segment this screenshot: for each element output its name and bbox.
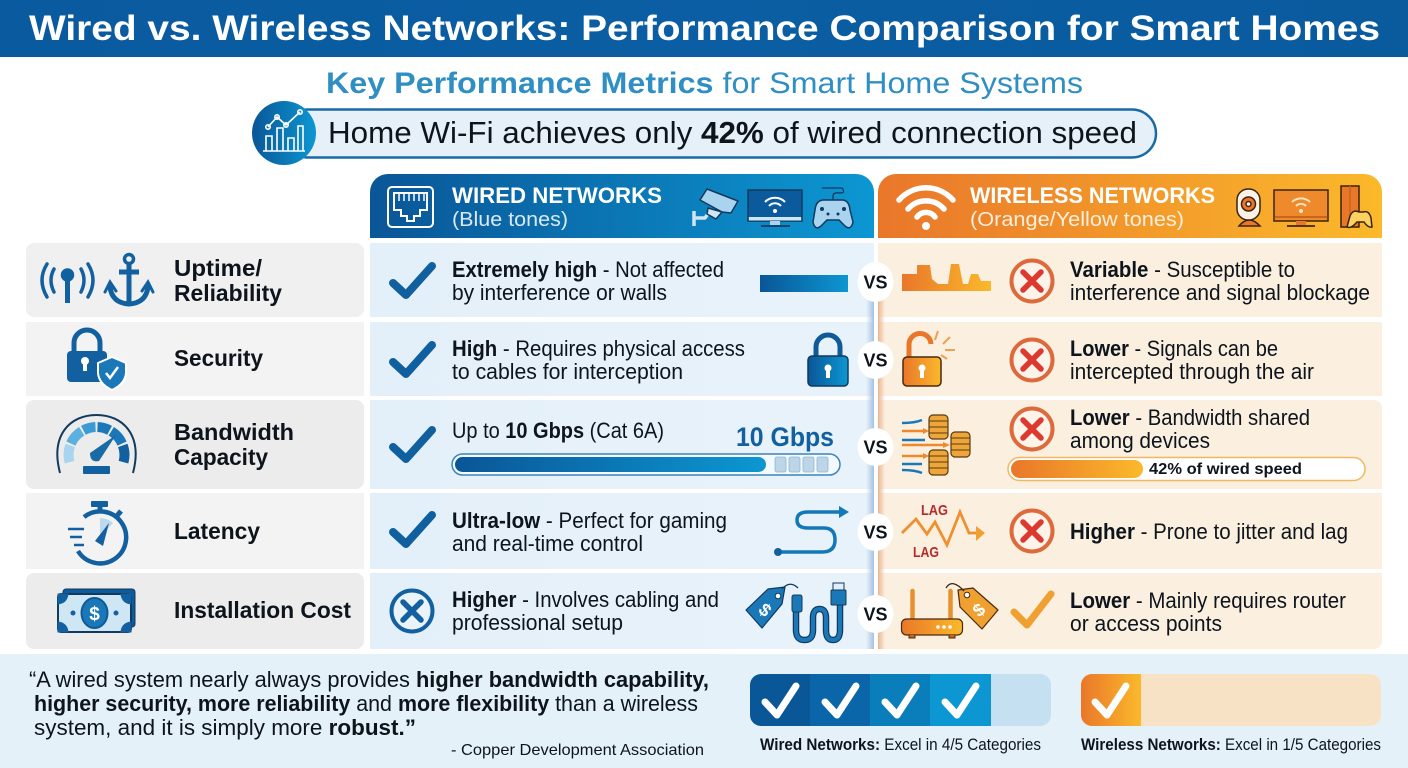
wired text — [452, 336, 745, 384]
wired text: Up to 10 Gbps (Cat 6A) — [452, 418, 664, 443]
panel: wired header — [370, 174, 874, 238]
icon: stopwatch — [68, 501, 126, 563]
wired score bar — [750, 674, 1051, 754]
icon: router and tag — [902, 584, 998, 638]
row: uptime / reliability — [42, 254, 1370, 306]
wired text — [452, 587, 719, 635]
vs badges: VS — [863, 604, 888, 624]
vs badges: VS — [863, 522, 888, 542]
vs badges: VS — [863, 438, 888, 458]
wireless text: or access points — [1070, 611, 1222, 636]
icon: banknote — [58, 589, 135, 632]
wireless cross — [1012, 408, 1052, 450]
icon: monitor with wifi — [748, 190, 802, 226]
10 Gbps value: 10 Gbps — [736, 422, 834, 452]
label: Bandwidth — [174, 419, 294, 445]
wireless text: among devices — [1070, 428, 1210, 453]
panel: bottom summary band — [0, 654, 1408, 768]
wireless text: Variable - Susceptible to — [1070, 257, 1295, 282]
row: bandwidth — [57, 405, 1365, 480]
row: uptime / reliability: Reliability — [174, 280, 282, 306]
wireless text: Lower - Signals can be — [1070, 336, 1278, 361]
wired bandwidth bar — [452, 454, 840, 475]
icon: game console — [1341, 186, 1372, 227]
title banner: Wired vs. Wireless Networks: Performance Comparison for Smart Homes — [29, 9, 1380, 48]
vs badges: VS — [863, 272, 888, 292]
wireless text: interference and signal blockage — [1070, 280, 1370, 305]
wireless bandwidth bar: 42% of wired speed — [1149, 461, 1302, 478]
icon: price tag and cable: $ — [755, 599, 775, 621]
icon: lag jitter: LAG — [913, 544, 939, 561]
wired cross — [392, 590, 432, 632]
label: Uptime/ — [174, 255, 263, 281]
subtitle: Key Performance Metrics for Smart Home Systems — [326, 67, 1083, 100]
icon: orange monitor — [1274, 190, 1328, 226]
label: Security — [174, 345, 263, 371]
panel: wired header: (Blue tones) — [452, 209, 568, 231]
callout: Wi-Fi speed statistic — [252, 101, 1156, 165]
wired check — [393, 430, 432, 459]
wireless text: Lower - Mainly requires router — [1070, 588, 1346, 613]
icon: anchor — [105, 254, 153, 304]
wired text — [452, 508, 727, 556]
panel: wireless header: WIRELESS NETWORKS — [970, 183, 1215, 208]
wired check — [393, 266, 432, 295]
row: bandwidth: Capacity — [174, 444, 268, 470]
wireless score bar: Wireless Networks: Excel in 1/5 Categories — [1081, 735, 1381, 754]
quote: higher security, more reliability and more flexibility than a wireless — [34, 691, 698, 716]
icon: security camera — [694, 189, 738, 226]
label: Latency — [174, 518, 260, 544]
panel: wireless header — [878, 174, 1382, 238]
wireless bandwidth bar — [1008, 458, 1365, 480]
wireless cross — [1012, 510, 1052, 552]
wireless text: Higher - Prone to jitter and lag — [1070, 519, 1348, 544]
wireless text — [1070, 257, 1370, 305]
quote: - Copper Development Association — [451, 742, 704, 759]
icon: low-latency path arrow — [774, 506, 849, 556]
row: installation cost — [58, 583, 1346, 640]
wired text — [452, 257, 724, 305]
wireless text: intercepted through the air — [1070, 359, 1314, 384]
row: security — [67, 330, 1314, 390]
wired text: High - Requires physical access — [452, 336, 745, 361]
panel: wireless header: (Orange/Yellow tones) — [970, 209, 1184, 231]
wireless cross — [1012, 340, 1052, 380]
wired score bar: Wired Networks: Excel in 4/5 Categories — [760, 735, 1041, 754]
icon: lock with shield — [67, 330, 126, 390]
wireless text — [1070, 336, 1314, 384]
label: Installation Cost — [174, 597, 351, 623]
icon: lag jitter — [902, 502, 985, 561]
icon: coins and arrows — [902, 415, 970, 475]
wireless text — [1070, 588, 1346, 636]
quote — [29, 667, 709, 759]
wireless check — [1014, 594, 1051, 625]
wired text: and real-time control — [452, 531, 643, 556]
quote: “A wired system nearly always provides higher bandwidth capability, — [29, 667, 709, 692]
icon: wifi — [899, 188, 953, 230]
panel: wired column backgrounds — [370, 243, 874, 649]
wired text: Extremely high - Not affected — [452, 257, 724, 282]
icon: speedometer — [57, 415, 136, 474]
panel: metric column backgrounds — [26, 243, 364, 649]
wired text: Ultra-low - Perfect for gaming — [452, 508, 727, 533]
wireless text — [1070, 405, 1310, 453]
icon: antenna — [42, 264, 93, 303]
wireless text: Lower - Bandwidth shared — [1070, 405, 1310, 430]
quote: system, and it is simply more robust.” — [34, 715, 416, 740]
variable signal shape — [902, 264, 991, 291]
icon: ethernet port — [388, 187, 433, 227]
wireless cross — [1012, 260, 1052, 302]
panel: wired header: WIRED NETWORKS — [452, 183, 662, 208]
wired check — [393, 515, 432, 544]
vs badges — [858, 262, 894, 633]
wired check — [393, 345, 432, 374]
wireless score bar — [1081, 674, 1381, 754]
icon: router and tag: $ — [969, 599, 989, 621]
wired text: Higher - Involves cabling and — [452, 587, 719, 612]
icon: webcam — [1237, 189, 1260, 226]
icon: lag jitter: LAG — [921, 502, 948, 519]
wired text: professional setup — [452, 610, 623, 635]
wired text: to cables for interception — [452, 359, 683, 384]
icon: price tag and cable — [746, 583, 846, 640]
icon: open lock — [903, 331, 955, 386]
wired text: by interference or walls — [452, 280, 667, 305]
vs badges: VS — [863, 350, 888, 370]
icon: closed lock — [808, 335, 848, 386]
stable signal bar — [760, 275, 848, 292]
title banner — [0, 0, 1408, 57]
row: latency — [68, 501, 1348, 563]
icon: gamepad — [813, 188, 853, 228]
icon: banknote: $ — [89, 604, 100, 625]
callout: Wi-Fi speed statistic: Home Wi-Fi achieves only 42% of wired connection speed — [328, 115, 1137, 150]
panel: wireless column backgrounds — [878, 243, 1382, 649]
